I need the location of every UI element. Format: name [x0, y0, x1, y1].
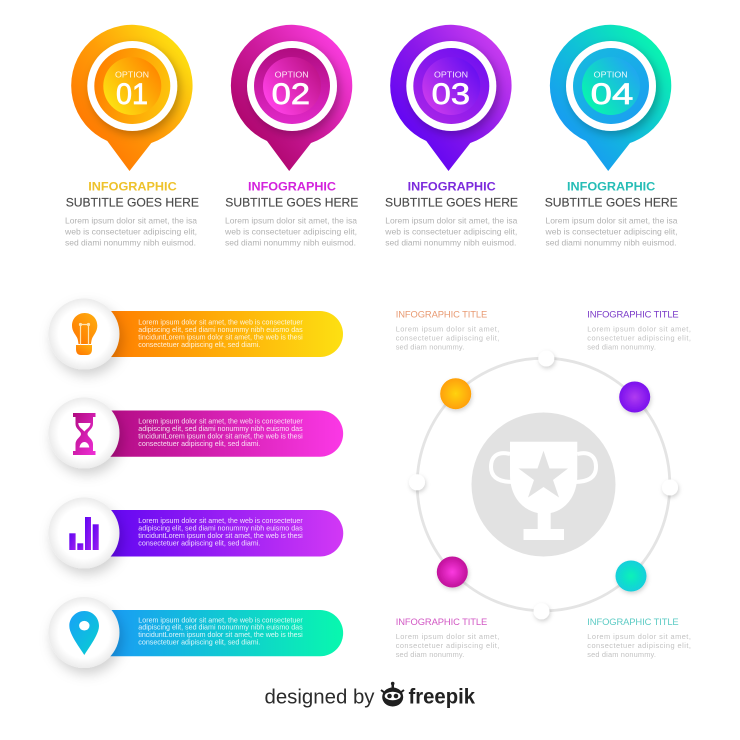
- subtitle 04: SUBTITLE GOES HERE: [545, 196, 678, 210]
- body text 01: [64, 217, 197, 247]
- teal node: [616, 560, 646, 592]
- subtitle 03: SUBTITLE GOES HERE: [385, 196, 518, 210]
- banner text: consectetuer adipiscing elit, sed diami.: [138, 341, 260, 349]
- banner text: adipiscing elit, sed diami nonummy nibh euismo das: [138, 425, 303, 433]
- callout: top left: [396, 308, 499, 352]
- white node left: [409, 474, 425, 490]
- body text 04: sed diami nonummy nibh euismod.: [546, 238, 676, 247]
- body text 04: [544, 217, 678, 247]
- white node right: [662, 480, 678, 496]
- location pin 01: [71, 25, 193, 171]
- banner: teal location: [48, 597, 343, 668]
- banner text: adipiscing elit, sed diami nonummy nibh euismo das: [138, 326, 303, 334]
- callout: top right: INFOGRAPHIC TITLE: [587, 308, 679, 319]
- body text 01: web is consectetuer adipiscing elit,: [64, 228, 197, 237]
- orange node: [440, 378, 471, 409]
- banner text: consectetuer adipiscing elit, sed diami.: [138, 539, 260, 547]
- callout: top right: [587, 308, 691, 352]
- banner text: adipiscing elit, sed diami nonummy nibh euismo das: [138, 524, 303, 532]
- banner: magenta hourglass: [48, 398, 343, 468]
- callout: top left: INFOGRAPHIC TITLE: [396, 308, 487, 319]
- magenta node: [437, 556, 468, 588]
- callout: bottom right: [587, 616, 691, 659]
- option 04 column: [544, 25, 678, 247]
- banner text: tinciduntLorem ipsum dolor sit amet, the web is thesi: [138, 432, 303, 440]
- body text 03: Lorem ipsum dolor sit amet, the isa: [385, 217, 518, 226]
- banner text: consectetuer adipiscing elit, sed diami.: [138, 639, 260, 647]
- trophy disc: [472, 412, 616, 556]
- purple node: [619, 382, 650, 412]
- callout: bottom right: INFOGRAPHIC TITLE: [587, 616, 679, 627]
- body text 03: sed diami nonummy nibh euismod.: [385, 238, 516, 247]
- banner: purple bars: [48, 498, 343, 568]
- body text 02: sed diami nonummy nibh euismod.: [225, 238, 356, 247]
- banner text: consectetuer adipiscing elit, sed diami.: [138, 440, 260, 448]
- location pin 04: 04: [591, 78, 633, 111]
- banner: orange bulb: [48, 298, 343, 370]
- callout: bottom left: Lorem ipsum dolor sit amet,: [396, 632, 499, 641]
- body text 02: web is consectetuer adipiscing elit,: [224, 228, 357, 237]
- banner text: tinciduntLorem ipsum dolor sit amet, the web is thesi: [138, 333, 303, 341]
- callout: bottom left: INFOGRAPHIC TITLE: [396, 616, 487, 627]
- heading 04: INFOGRAPHIC: [567, 179, 655, 193]
- banner text: [138, 319, 303, 349]
- callout: bottom left: consectetuer adipiscing elit,: [396, 641, 499, 650]
- banner text: Lorem ipsum dolor sit amet, the web is consectetuer: [138, 418, 303, 426]
- body text 03: web is consectetuer adipiscing elit,: [384, 228, 517, 237]
- option 03 column: [384, 25, 518, 247]
- orbit diagram: [409, 350, 678, 619]
- location pin 01: OPTION: [115, 70, 149, 80]
- location pin 02: OPTION: [275, 70, 309, 80]
- body text 01: Lorem ipsum dolor sit amet, the isa: [65, 217, 197, 226]
- heading 02: INFOGRAPHIC: [248, 179, 336, 193]
- location pin 02: 02: [272, 78, 310, 111]
- banner text: tinciduntLorem ipsum dolor sit amet, the web is thesi: [138, 532, 303, 540]
- location pin 04: OPTION: [594, 70, 628, 80]
- callout: bottom left: sed diam nonummy.: [396, 650, 464, 659]
- banner text: tinciduntLorem ipsum dolor sit amet, the web is thesi: [138, 631, 303, 639]
- heading 03: INFOGRAPHIC: [408, 179, 496, 193]
- subtitle 01: SUBTITLE GOES HERE: [66, 196, 199, 210]
- body text 04: web is consectetuer adipiscing elit,: [544, 228, 678, 237]
- icon badge: light bulb: [48, 298, 120, 370]
- location pin 01: 01: [116, 78, 148, 111]
- icon badge: bar chart: [48, 498, 120, 568]
- footer credit: [264, 682, 475, 708]
- body text 02: Lorem ipsum dolor sit amet, the isa: [225, 217, 357, 226]
- banner text: Lorem ipsum dolor sit amet, the web is consectetuer: [138, 319, 303, 327]
- callout: top right: Lorem ipsum dolor sit amet,: [587, 325, 691, 334]
- white node bottom: [534, 603, 550, 619]
- location pin 02: [231, 25, 352, 171]
- callout: bottom right: consectetuer adipiscing elit,: [587, 641, 691, 650]
- body text 02: [224, 217, 357, 247]
- location pin 03: [390, 25, 512, 171]
- footer credit: designed by: [264, 686, 374, 708]
- location pin 03: 03: [432, 78, 470, 111]
- callout: top left: Lorem ipsum dolor sit amet,: [396, 325, 499, 334]
- banner text: [138, 517, 303, 547]
- white node top: [538, 350, 554, 366]
- icon badge: map pin: [48, 597, 120, 668]
- callout: bottom right: Lorem ipsum dolor sit amet,: [587, 632, 691, 641]
- banner text: [138, 616, 303, 647]
- option 01 column: [64, 25, 199, 247]
- callout: bottom left: [396, 616, 499, 659]
- subtitle 02: SUBTITLE GOES HERE: [225, 196, 358, 210]
- location pin 03: OPTION: [434, 70, 468, 80]
- banner text: adipiscing elit, sed diami nonummy nibh euismo das: [138, 624, 303, 632]
- footer credit: freepik: [408, 685, 475, 708]
- callout: top right: sed diam nonummy.: [587, 343, 656, 352]
- banner text: Lorem ipsum dolor sit amet, the web is consectetuer: [138, 616, 303, 624]
- icon: freepik mascot: [381, 682, 404, 706]
- body text 04: Lorem ipsum dolor sit amet, the isa: [546, 217, 678, 226]
- banner text: Lorem ipsum dolor sit amet, the web is consectetuer: [138, 517, 303, 525]
- location pin 04: [550, 25, 671, 171]
- callout: top left: consectetuer adipiscing elit,: [396, 334, 499, 343]
- callout: bottom right: sed diam nonummy.: [587, 650, 656, 659]
- heading 01: INFOGRAPHIC: [88, 179, 177, 193]
- body text 01: sed diami nonummy nibh euismod.: [65, 238, 196, 247]
- callout: top left: sed diam nonummy.: [396, 343, 464, 352]
- body text 03: [384, 217, 518, 247]
- banner text: [138, 418, 303, 448]
- callout: top right: consectetuer adipiscing elit,: [587, 334, 691, 343]
- icon badge: hourglass: [48, 398, 120, 468]
- orbit ring: [417, 358, 670, 611]
- option 02 column: [224, 25, 358, 247]
